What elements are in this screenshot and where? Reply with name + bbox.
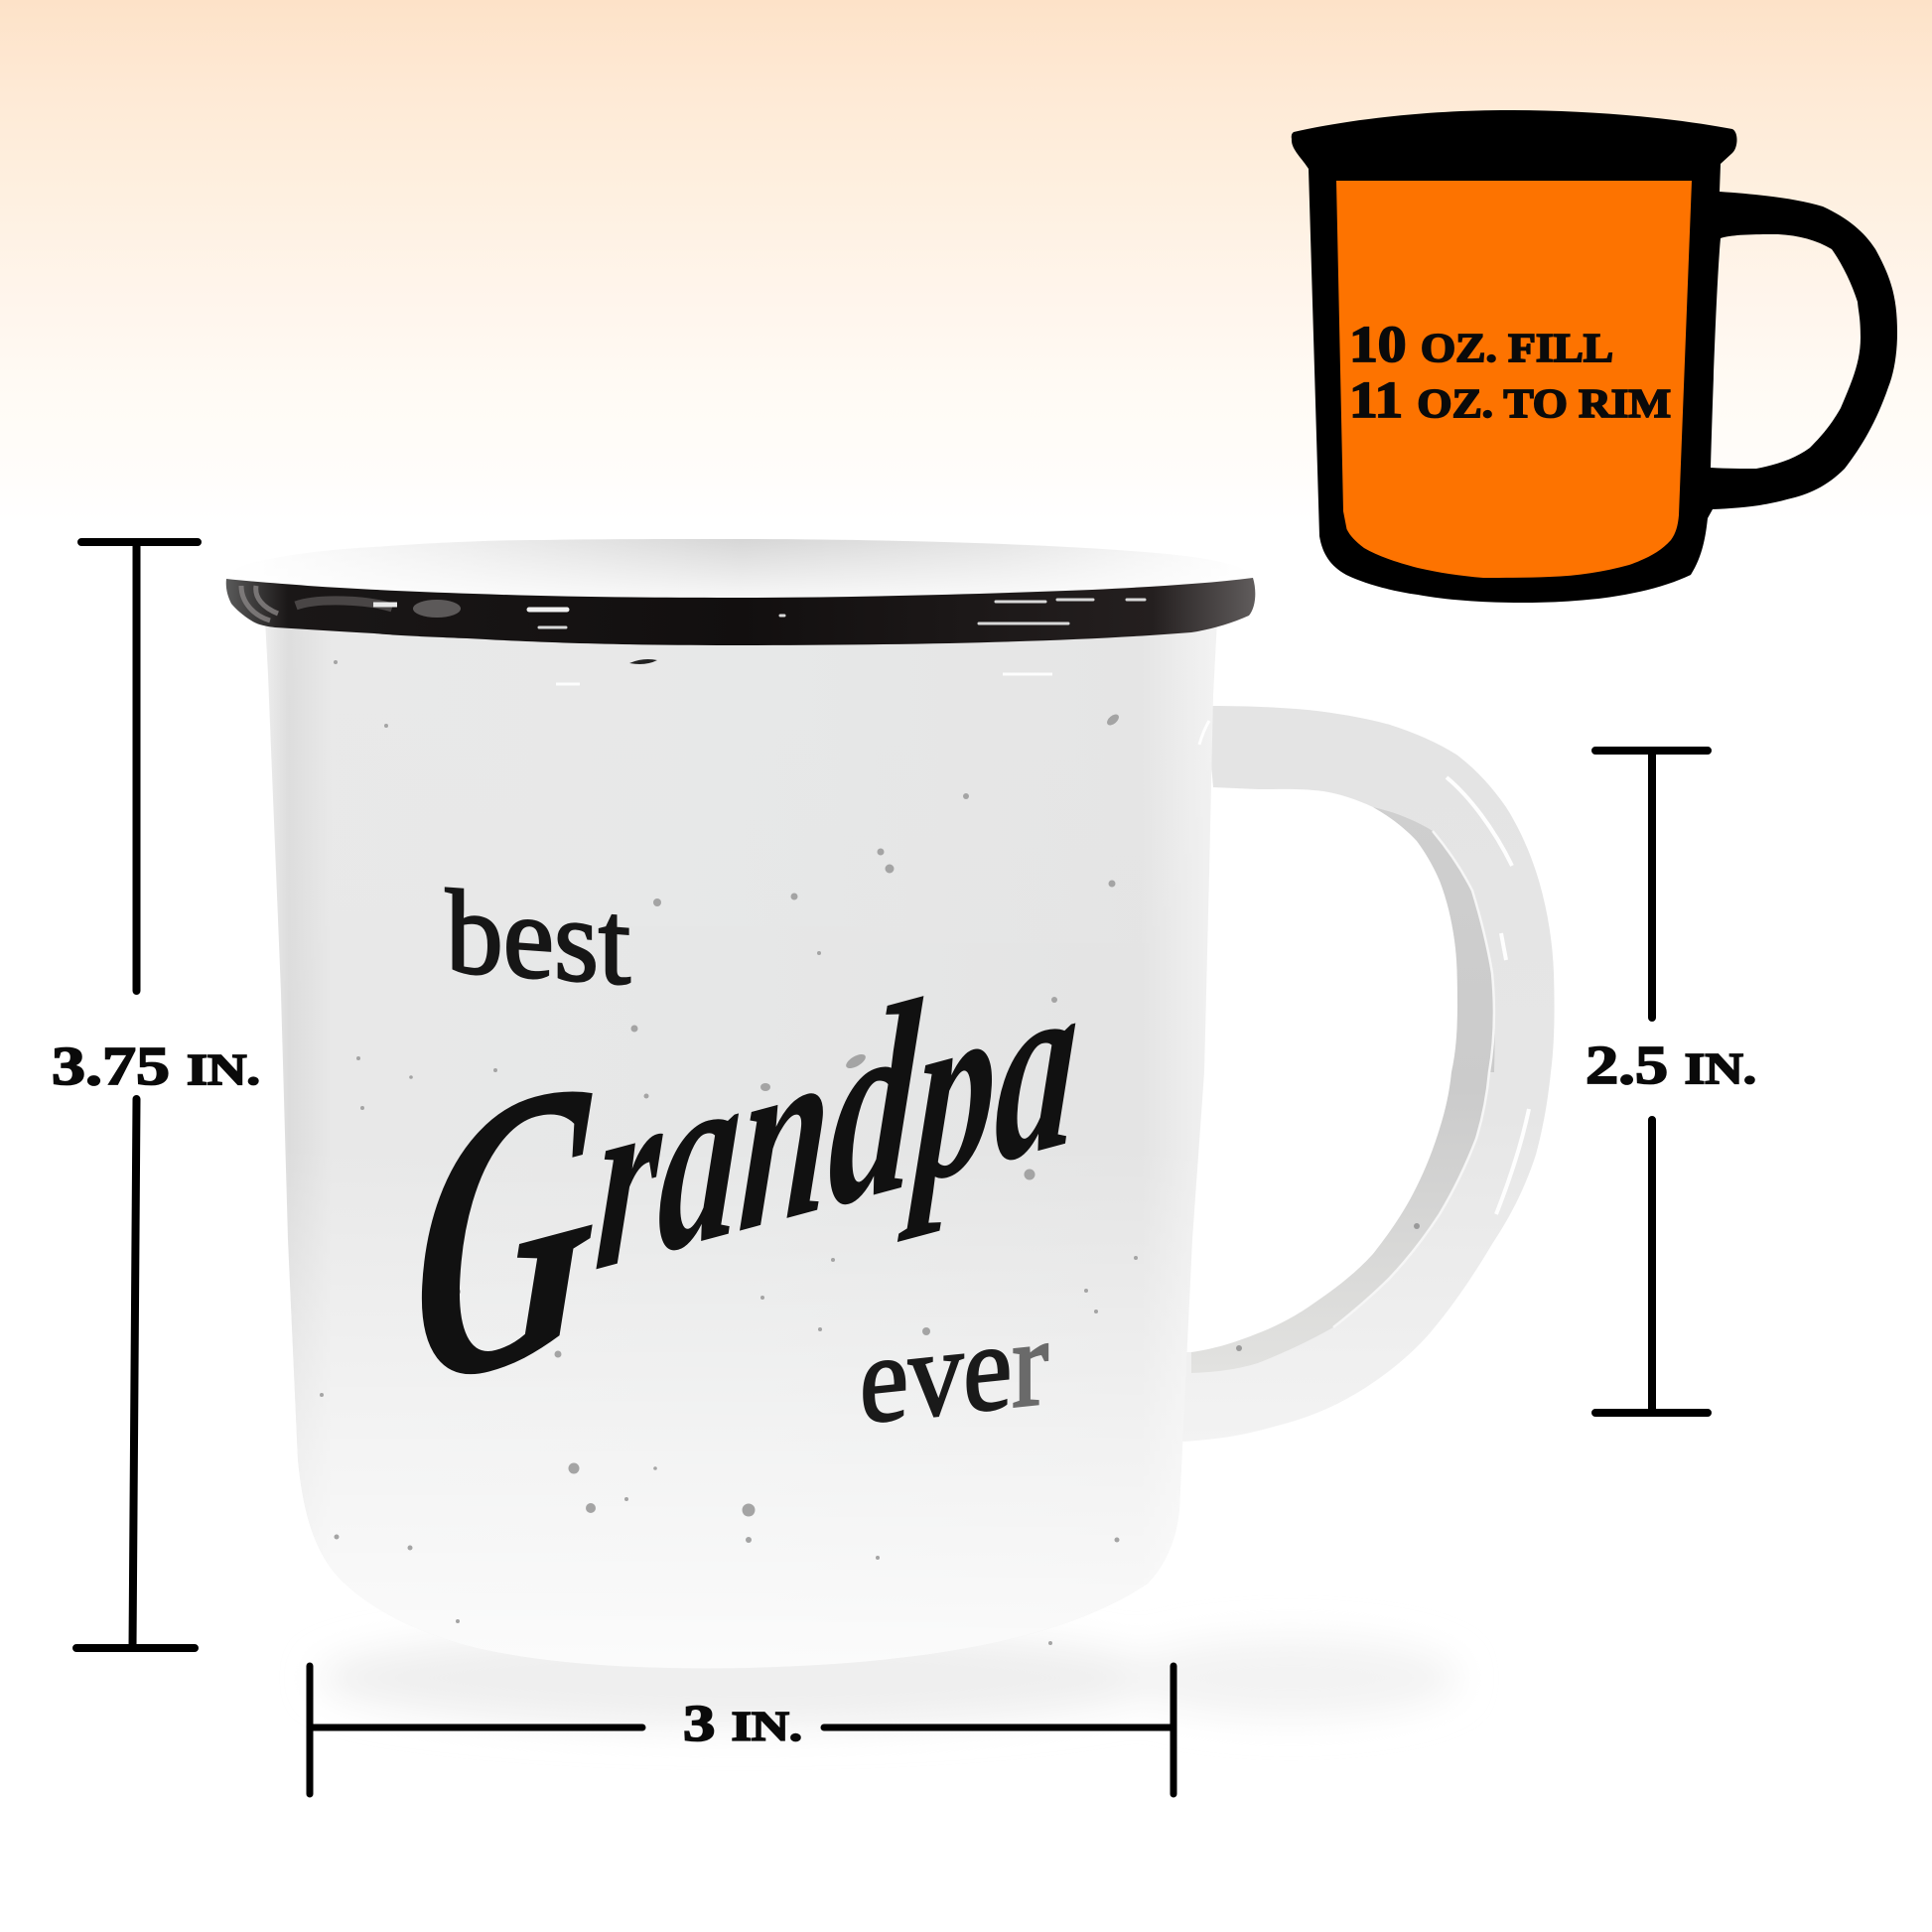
mug handle: [1181, 706, 1555, 1442]
mug opening interior: [228, 539, 1253, 608]
width bracket: [310, 1666, 1173, 1794]
dimension: width 3 in: [310, 1666, 1173, 1794]
mug text: Grandpa: ran: [590, 981, 838, 1326]
black enamel rim: [226, 578, 1255, 645]
handle glaze highlights: [1447, 777, 1529, 1214]
mug text: Grandpa: dpa: [823, 914, 1085, 1266]
speckles: [320, 660, 1138, 1645]
handle inner shaded band: [1191, 807, 1495, 1373]
mug body: [265, 621, 1217, 1668]
rim chip: [629, 659, 657, 664]
mug text: best: best: [446, 865, 630, 1010]
main photo: enamel mug: [226, 539, 1555, 1668]
handle label: 2.5 IN.: [1586, 1035, 1756, 1095]
capacity mug icon: [1292, 110, 1897, 603]
mug text: Grandpa: G: [404, 988, 608, 1475]
icon: orange fill: [1336, 181, 1692, 578]
height bracket: [76, 542, 198, 1648]
mug text: ever: ever: [860, 1293, 1048, 1450]
height label: 3.75 IN.: [52, 1035, 260, 1096]
rim reflections: [241, 586, 278, 621]
glaze highlights: [556, 674, 1209, 745]
capacity text: rim: 11 OZ. TO RIM: [1349, 372, 1671, 429]
handle bracket: [1595, 751, 1708, 1413]
dimension: handle height 2.5 in: [1586, 751, 1756, 1413]
icon: mug silhouette: [1292, 110, 1897, 603]
body lower highlight: [265, 621, 1217, 1668]
width label: 3 IN.: [683, 1696, 802, 1752]
capacity text: fill: 10 OZ. FILL: [1349, 317, 1613, 373]
mug shadow: [318, 1628, 1459, 1727]
dimension: height 3.75 in: [52, 542, 260, 1648]
